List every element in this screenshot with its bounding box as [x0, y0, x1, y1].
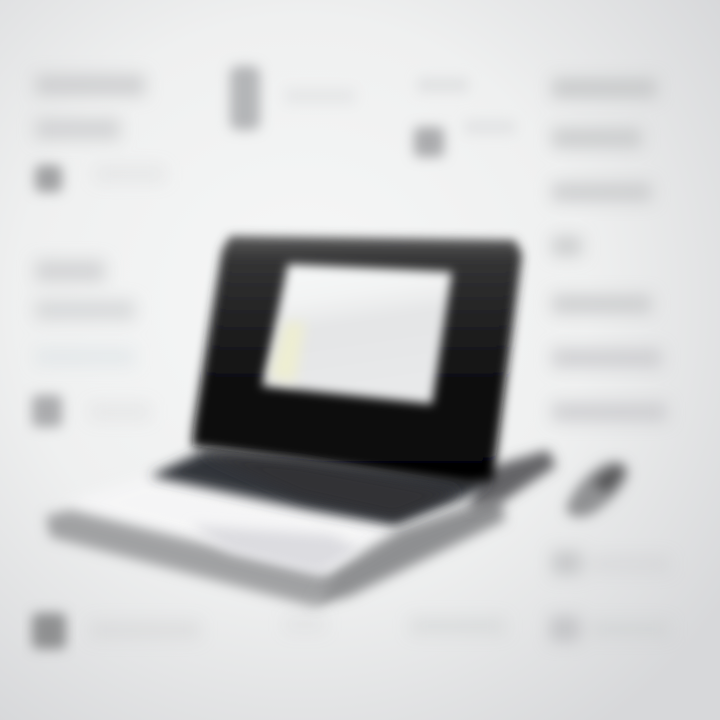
hinge wing: [470, 450, 556, 510]
base lit panel: [190, 525, 360, 574]
icon and text smudges: top centre: [230, 66, 515, 157]
screen lid: [192, 236, 522, 484]
text smudges: right column: [285, 78, 670, 642]
icons: left column: [32, 165, 66, 649]
screen display: [262, 264, 452, 404]
base right edge: [312, 495, 505, 606]
base front edge: [46, 510, 350, 606]
keyboard overlap: [198, 452, 460, 518]
side stripe on screen: [270, 322, 305, 382]
laptop: [46, 236, 628, 606]
mouse: [566, 462, 628, 517]
text smudges: left column: [35, 74, 200, 639]
base top surface: [60, 475, 400, 570]
keyboard: [150, 450, 490, 525]
